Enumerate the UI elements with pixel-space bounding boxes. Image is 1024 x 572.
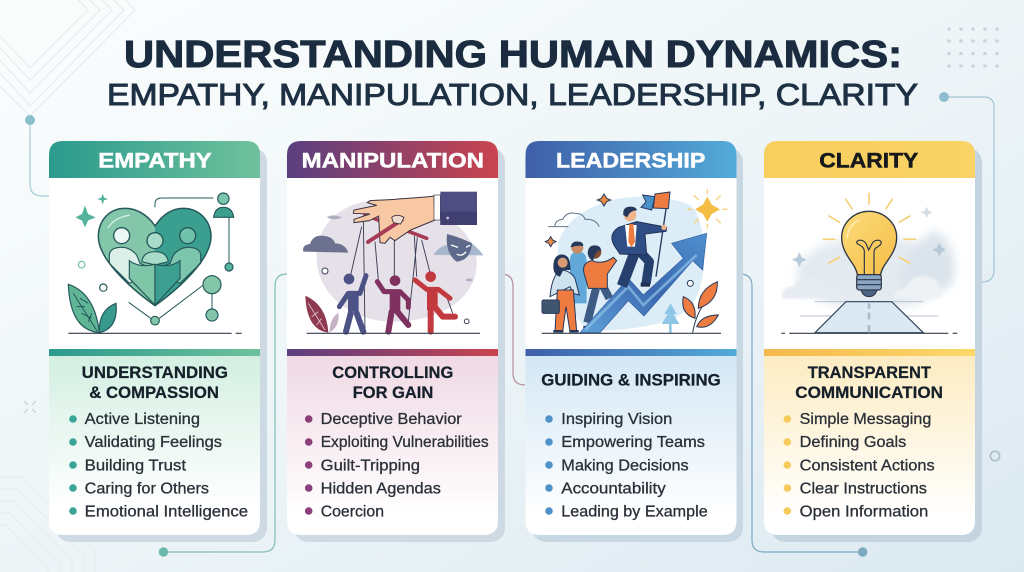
manipulation list: [305, 411, 489, 520]
connector: leadership to clarity: [737, 274, 867, 557]
title line 1: UNDERSTANDING HUMAN DYNAMICS:: [124, 34, 902, 76]
leadership list: Accountability: [561, 480, 666, 498]
empathy header: [49, 141, 260, 178]
connector: top left node: [25, 115, 49, 196]
connector: top right node: [939, 92, 994, 282]
panel: clarity: [764, 141, 982, 542]
clarity list: Defining Goals: [800, 434, 906, 451]
manipulation list: Coercion: [321, 504, 384, 520]
leadership list: Leading by Example: [561, 504, 708, 520]
leadership list: Making Decisions: [561, 458, 689, 474]
title line 2: EMPATHY, MANIPULATION, LEADERSHIP, CLARITY: [107, 78, 918, 112]
clarity list: Open Information: [800, 504, 928, 520]
icon: heart with people: [68, 193, 242, 333]
empathy list: Caring for Others: [85, 480, 209, 498]
leadership details: [526, 356, 736, 535]
clarity list: [784, 411, 935, 520]
clarity subtitle: COMMUNICATION: [795, 384, 943, 402]
leadership header: [526, 141, 736, 178]
decoration: ring: [990, 451, 1000, 461]
panel: empathy: [49, 141, 267, 542]
clarity details: [764, 356, 975, 535]
icon: lightbulb over road: [781, 193, 957, 333]
clarity list: Clear Instructions: [800, 480, 927, 498]
empathy list: Emotional Intelligence: [85, 504, 248, 520]
empathy subtitle: & COMPASSION: [89, 384, 219, 402]
panel: manipulation: [287, 141, 505, 542]
clarity header: CLARITY: [819, 150, 918, 172]
decoration: dot grid: [947, 27, 999, 68]
connector: manipulation to leadership: [498, 274, 525, 385]
icon: leader climbing arrow: [542, 189, 727, 333]
manipulation subtitle: [332, 364, 453, 402]
manipulation header: [287, 141, 498, 178]
manipulation subtitle: FOR GAIN: [353, 384, 433, 402]
panel: leadership: [526, 141, 743, 542]
connector: empathy to manipulation: [159, 274, 287, 557]
empathy subtitle: UNDERSTANDING: [82, 364, 228, 382]
empathy list: Active Listening: [85, 411, 200, 428]
manipulation list: Exploiting Vulnerabilities: [321, 434, 489, 451]
clarity subtitle: TRANSPARENT: [808, 364, 931, 382]
empathy header: EMPATHY: [98, 150, 212, 172]
manipulation details: [287, 356, 498, 535]
clarity list: Simple Messaging: [800, 411, 931, 428]
title: [107, 34, 918, 112]
leadership list: Inspiring Vision: [561, 411, 672, 428]
empathy list: Validating Feelings: [85, 434, 222, 451]
leadership subtitle: GUIDING & INSPIRING: [541, 372, 721, 390]
manipulation subtitle: CONTROLLING: [332, 364, 453, 382]
leadership list: [545, 411, 708, 520]
leadership header: LEADERSHIP: [556, 150, 705, 172]
manipulation list: Hidden Agendas: [321, 480, 441, 498]
empathy subtitle: [82, 364, 228, 402]
manipulation list: Guilt-Tripping: [321, 458, 420, 474]
leadership list: Empowering Teams: [561, 434, 705, 451]
icon: puppet master: [303, 192, 483, 333]
clarity header: [764, 141, 975, 178]
decoration: small burst: [24, 401, 36, 413]
empathy list: [69, 411, 248, 520]
manipulation header: MANIPULATION: [302, 150, 484, 172]
clarity list: Consistent Actions: [800, 458, 935, 474]
clarity subtitle: [795, 364, 943, 402]
empathy details: [49, 356, 260, 535]
empathy list: Building Trust: [85, 458, 187, 474]
manipulation list: Deceptive Behavior: [321, 411, 462, 428]
